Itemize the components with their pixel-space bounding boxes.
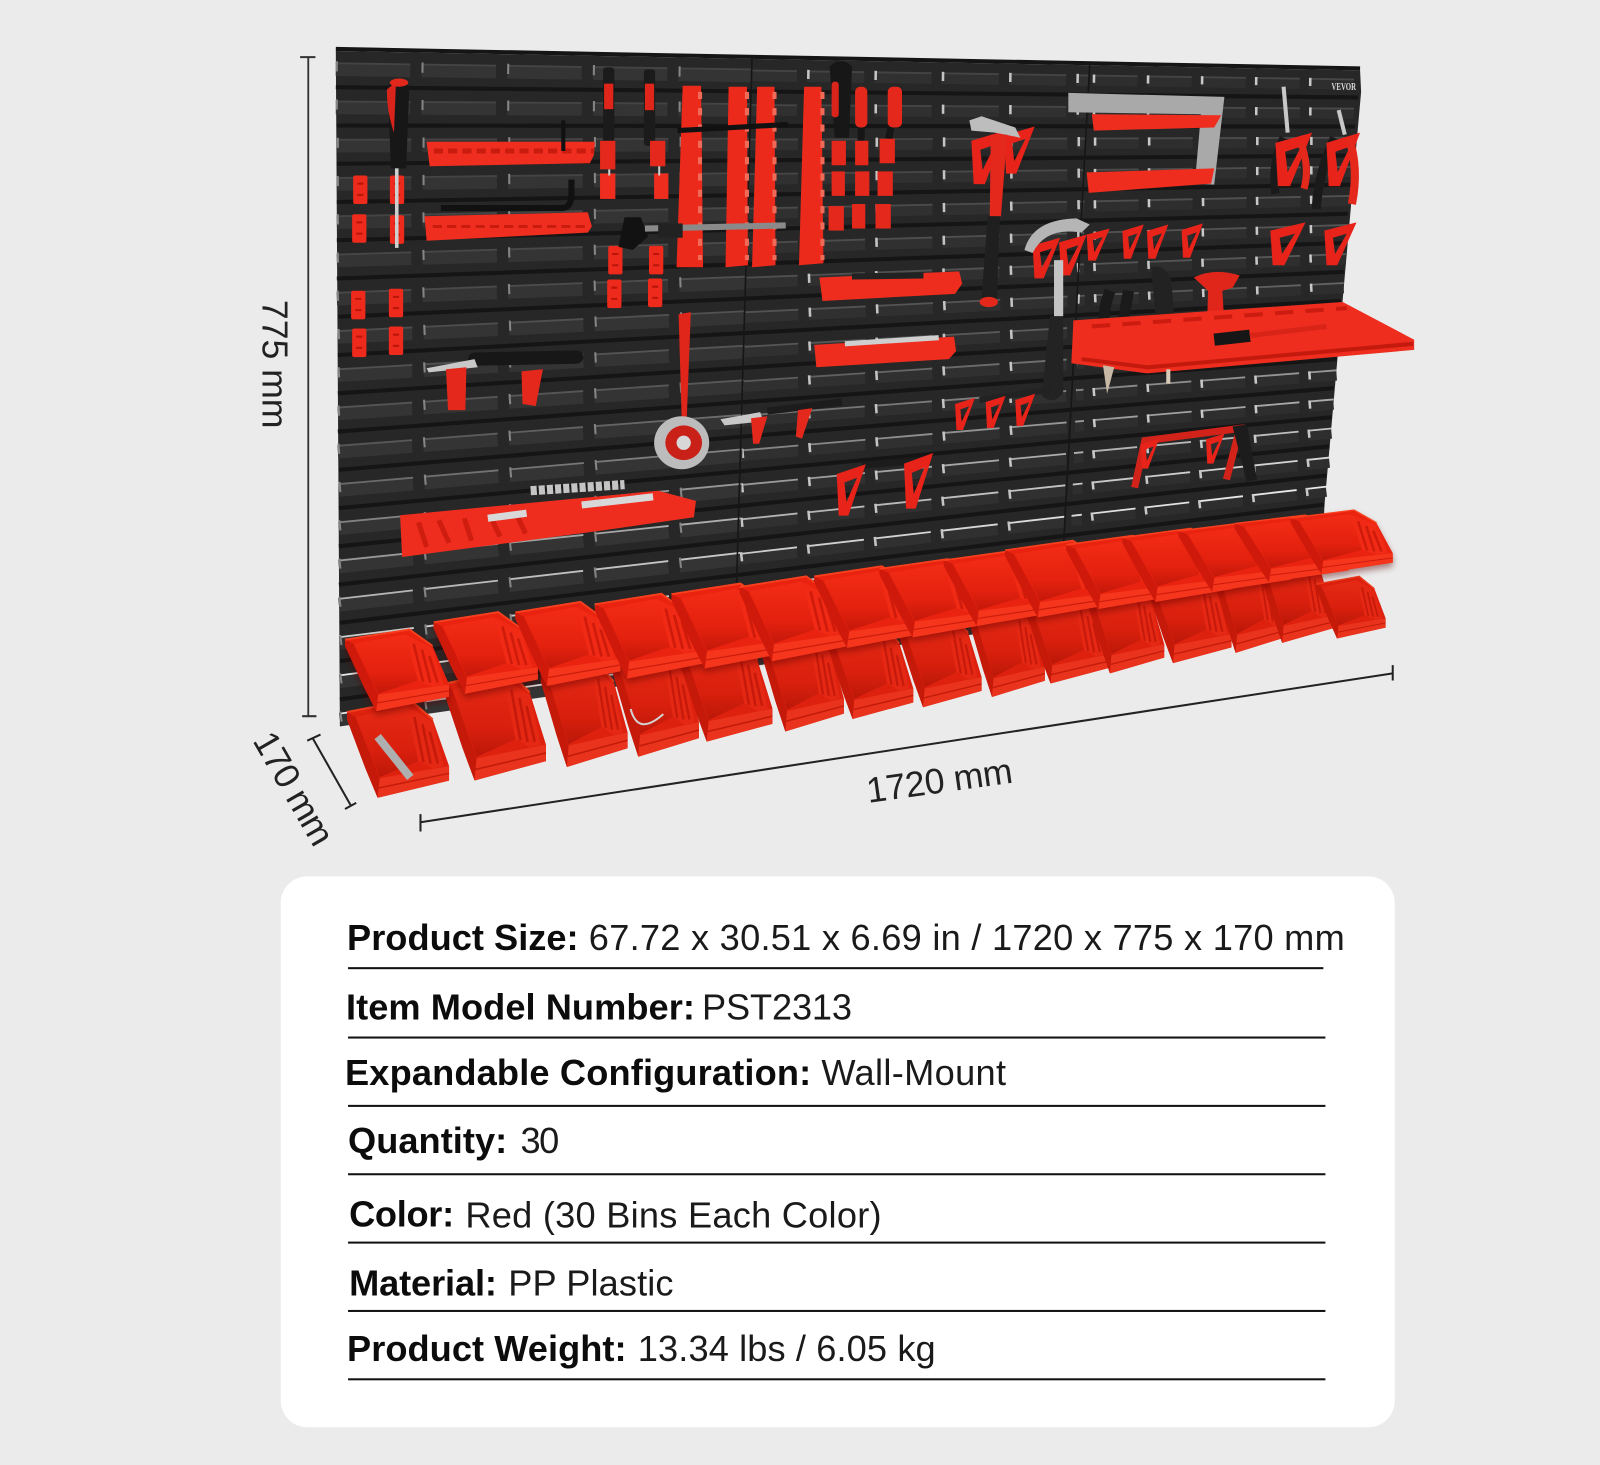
arrow: depth dimension line <box>307 735 356 809</box>
row: item model number: PST2313 <box>702 987 852 1028</box>
row: color <box>348 1193 1325 1244</box>
bins: bottom row <box>347 558 1386 798</box>
panel: specification card <box>281 876 1395 1427</box>
row: item model number <box>346 987 1325 1039</box>
icon: two pliers <box>1274 87 1360 209</box>
small red clips, left column <box>351 175 663 357</box>
row: quantity: 30 <box>520 1120 559 1161</box>
icon: screwdriver <box>387 79 409 248</box>
icon: caliper <box>618 124 788 250</box>
icon: three clips under hammer <box>955 390 1051 430</box>
row: item model number: Item Model Number: <box>346 987 695 1028</box>
icon: middle rails <box>814 271 962 367</box>
row: color: Color: <box>349 1193 454 1234</box>
row: product weight: Product Weight: <box>347 1328 627 1369</box>
icon: knife on pegs <box>720 402 842 444</box>
icon: rail 2 with allen key <box>425 180 592 241</box>
panel: black pegboard wall <box>336 49 1361 726</box>
icon: hammer two <box>1024 218 1110 400</box>
icon: cutter on two pegs <box>427 357 577 410</box>
icon: screwdrivers with 3x3 clips <box>829 61 902 231</box>
row: quantity: Quantity: <box>348 1120 507 1161</box>
label: 775 mm: 775 mm <box>254 300 294 428</box>
label: 170 mm: 170 mm <box>245 725 342 852</box>
row: product size: Product Size: <box>347 917 579 958</box>
icon: red hacksaw frame <box>1135 424 1257 488</box>
icon: steel square with two rails <box>1068 93 1224 193</box>
row: product weight <box>347 1328 1325 1380</box>
row: expandable configuration: Expandable Configuration: <box>345 1052 811 1093</box>
bins: top row <box>345 510 1393 711</box>
logo: VEVOR: VEVOR <box>1332 82 1356 93</box>
row: product size <box>347 917 1345 969</box>
row: material: Material: <box>349 1263 497 1304</box>
row: expandable configuration <box>345 1052 1325 1107</box>
row: product size: 67.72 x 30.51 x 6.69 in / 1720 x 775 x 170 mm <box>589 917 1345 958</box>
icon: two hanging screwdrivers <box>600 67 668 199</box>
row: expandable configuration: Wall-Mount <box>821 1052 1006 1093</box>
panel: lower left shelf with sockets <box>400 485 696 557</box>
arrow: width dimension line <box>420 665 1393 831</box>
row: material <box>348 1263 1325 1312</box>
row: product weight: 13.34 lbs / 6.05 kg <box>638 1328 936 1369</box>
icon: triangle clips row <box>1122 222 1357 265</box>
label: 1720 mm: 1720 mm <box>864 751 1015 811</box>
panel: large upper right shelf with tools <box>1071 267 1414 394</box>
arrow: height dimension line <box>300 57 316 716</box>
icon: rail 1 with hook <box>427 120 595 166</box>
row: quantity <box>348 1120 1325 1175</box>
icon: hammer one <box>969 116 1035 307</box>
row: color: Red (30 Bins Each Color) <box>465 1194 882 1235</box>
icon: four long red bars <box>677 86 823 267</box>
icon: handle on two clips <box>837 453 933 516</box>
icon: tape measure <box>654 312 709 469</box>
row: material: PP Plastic <box>508 1263 673 1304</box>
